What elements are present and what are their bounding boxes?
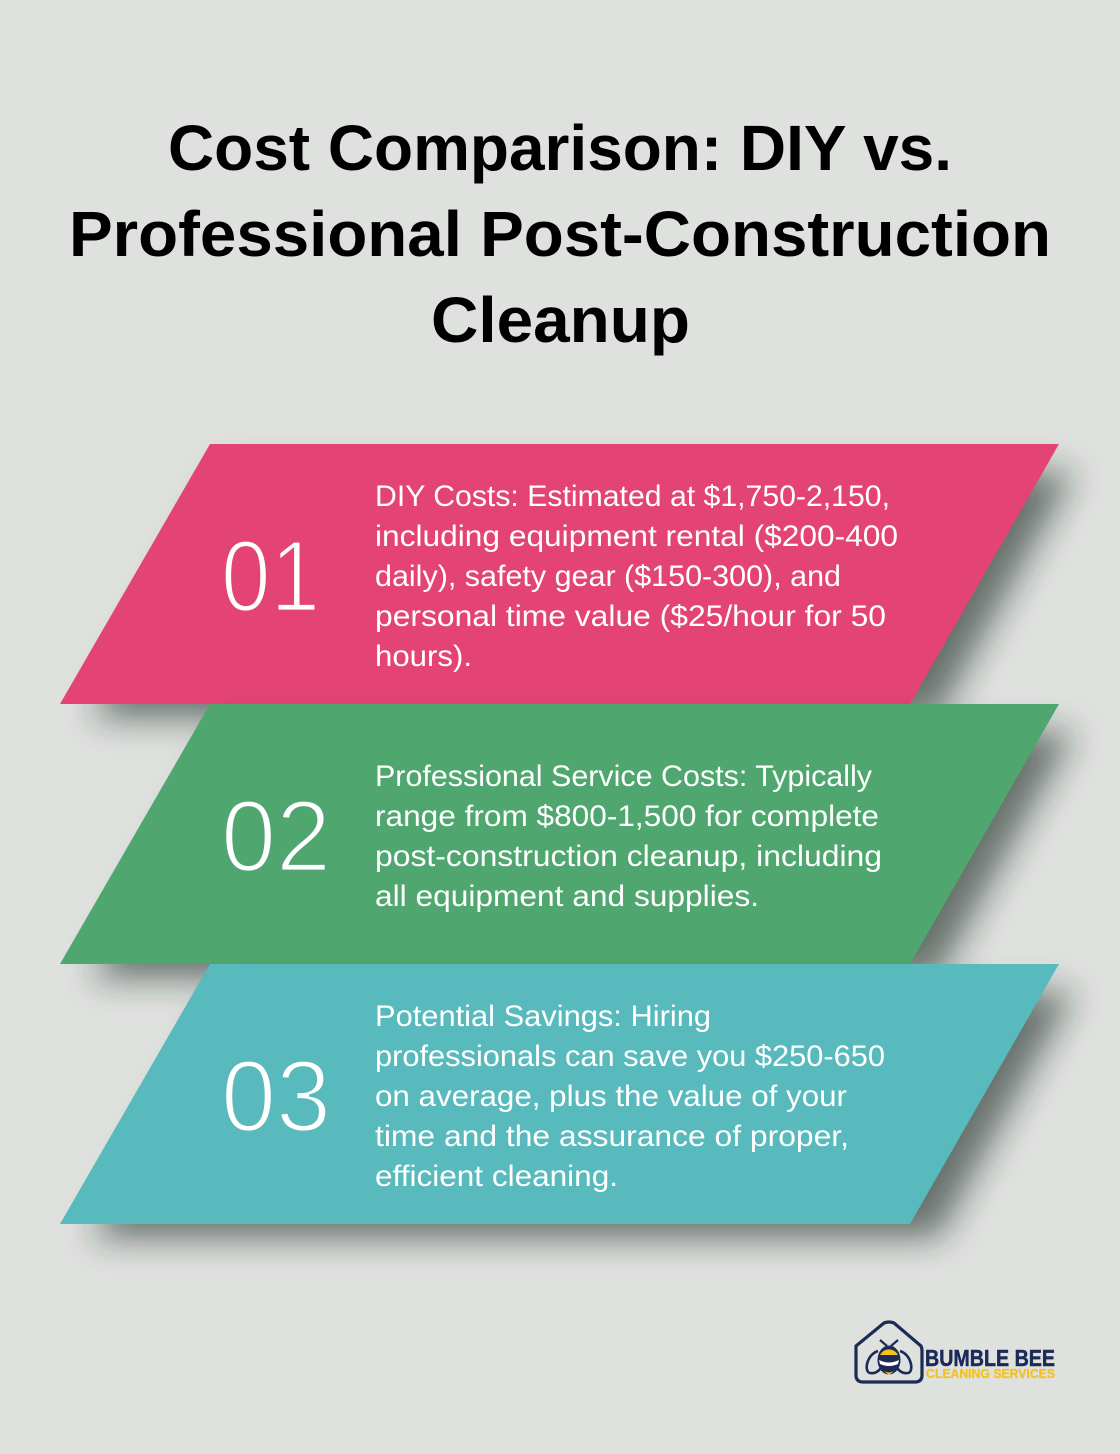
- icon: house with bee: [856, 1322, 922, 1382]
- text: professional service costs: [375, 760, 882, 913]
- text: DIY costs: personal time value ($25/hour for 50: [375, 600, 886, 633]
- text: professional service costs: all equipment and supplies.: [375, 880, 759, 913]
- text: potential savings: efficient cleaning.: [375, 1160, 618, 1193]
- title: Cleanup: [431, 284, 690, 356]
- text: DIY costs: hours).: [375, 640, 472, 673]
- text: DIY costs: daily), safety gear ($150-300), and: [375, 560, 841, 593]
- panel: professional service costs: [60, 704, 1074, 978]
- text: professional service costs: post-construction cleanup, including: [375, 840, 882, 873]
- text: DIY costs: including equipment rental ($200-400: [375, 520, 898, 553]
- text: DIY costs: DIY Costs: Estimated at $1,750-2,150,: [375, 480, 890, 513]
- panel: potential savings: [60, 964, 1074, 1238]
- title: Cost Comparison: DIY vs.: [168, 112, 952, 184]
- text: potential savings: time and the assurance of proper,: [375, 1120, 849, 1153]
- text: potential savings: on average, plus the value of your: [375, 1080, 847, 1113]
- panel: DIY costs: [60, 444, 1074, 718]
- logo wordmark: BUMBLE BEE: [925, 1345, 1055, 1371]
- title: [69, 112, 1051, 356]
- text: professional service costs: Professional Service Costs: Typically: [375, 760, 872, 793]
- logo tagline: CLEANING SERVICES: [926, 1367, 1055, 1381]
- title: Professional Post-Construction: [69, 198, 1051, 270]
- text: DIY costs: [375, 480, 898, 673]
- number 03: 03: [221, 1041, 331, 1153]
- text: professional service costs: range from $800-1,500 for complete: [375, 800, 879, 833]
- text: potential savings: [375, 1000, 885, 1193]
- text: potential savings: professionals can save you $250-650: [375, 1040, 885, 1073]
- number 01: 01: [221, 521, 320, 633]
- logo: Bumble Bee Cleaning Services: [856, 1322, 1055, 1382]
- number 02: 02: [221, 781, 331, 893]
- text: potential savings: Potential Savings: Hiring: [375, 1000, 711, 1033]
